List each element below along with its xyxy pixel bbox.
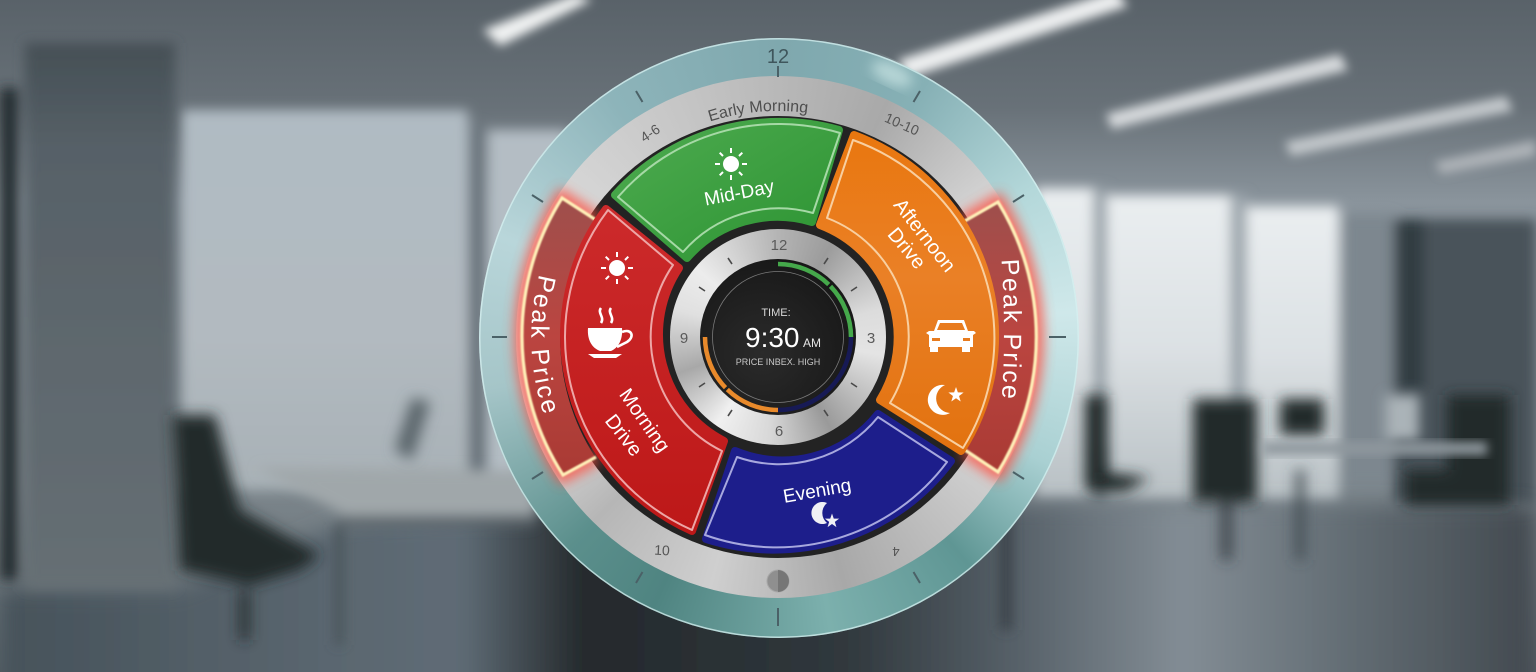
panel: mid-day sector (615, 122, 840, 258)
label: outer 12: 12 (767, 46, 789, 68)
panel: evening sector (705, 414, 951, 550)
metal ring labels (637, 100, 922, 559)
icon: moon and star (928, 385, 964, 415)
inner metal ring (670, 229, 886, 445)
label: right peak price: Peak Price (1002, 260, 1022, 398)
icon: sun (715, 148, 747, 180)
icon: small moon and star (811, 502, 839, 527)
label: early morning: Early Morning (708, 100, 808, 122)
inner ring numerals: 12 (771, 237, 787, 254)
label: 10: 10 (654, 542, 670, 558)
time label: TIME: (761, 307, 791, 319)
label: 4-6: 4-6 (637, 121, 663, 145)
label: afternoon drive: Drive (883, 224, 930, 274)
dark display disc (700, 259, 856, 415)
inner ring numerals: 9 (680, 330, 688, 347)
label: left peak price: Peak Price (531, 276, 556, 413)
time value: AM (803, 336, 821, 350)
icon: coffee cup (588, 308, 632, 358)
time value: 9:30 (745, 322, 800, 353)
label: morning drive: Morning (614, 385, 674, 456)
icon: car (926, 320, 976, 352)
dark hub behind sectors (553, 116, 1003, 558)
glass highlight (868, 56, 916, 92)
inner ring numerals: 3 (867, 330, 875, 347)
label: afternoon drive: Afternoon (889, 195, 960, 277)
label: 4: 4 (892, 544, 900, 559)
glass ring ticks (492, 66, 1066, 626)
panel: right peak price (954, 186, 1052, 487)
arc: orange segments (705, 337, 778, 410)
panel: afternoon drive sector (820, 135, 995, 451)
arc: navy segment (778, 337, 851, 410)
label: mid-day: Mid-Day (703, 176, 776, 211)
metal ring (516, 76, 1040, 598)
price index: PRICE INBEX. HIGH (736, 357, 820, 367)
inner ring numerals (680, 237, 875, 440)
glass outer ring (479, 38, 1079, 638)
label: evening: Evening (782, 475, 853, 508)
inner ring numerals: 6 (775, 423, 783, 440)
icon: sun (601, 252, 633, 284)
label: 10-10: 10-10 (882, 109, 922, 139)
panel: morning drive sector (564, 209, 724, 531)
knob (767, 570, 789, 592)
label: morning drive: Drive (600, 410, 646, 461)
arc: green segments (778, 264, 851, 337)
inner ring ticks (699, 258, 857, 416)
panel: left peak price (506, 182, 605, 490)
